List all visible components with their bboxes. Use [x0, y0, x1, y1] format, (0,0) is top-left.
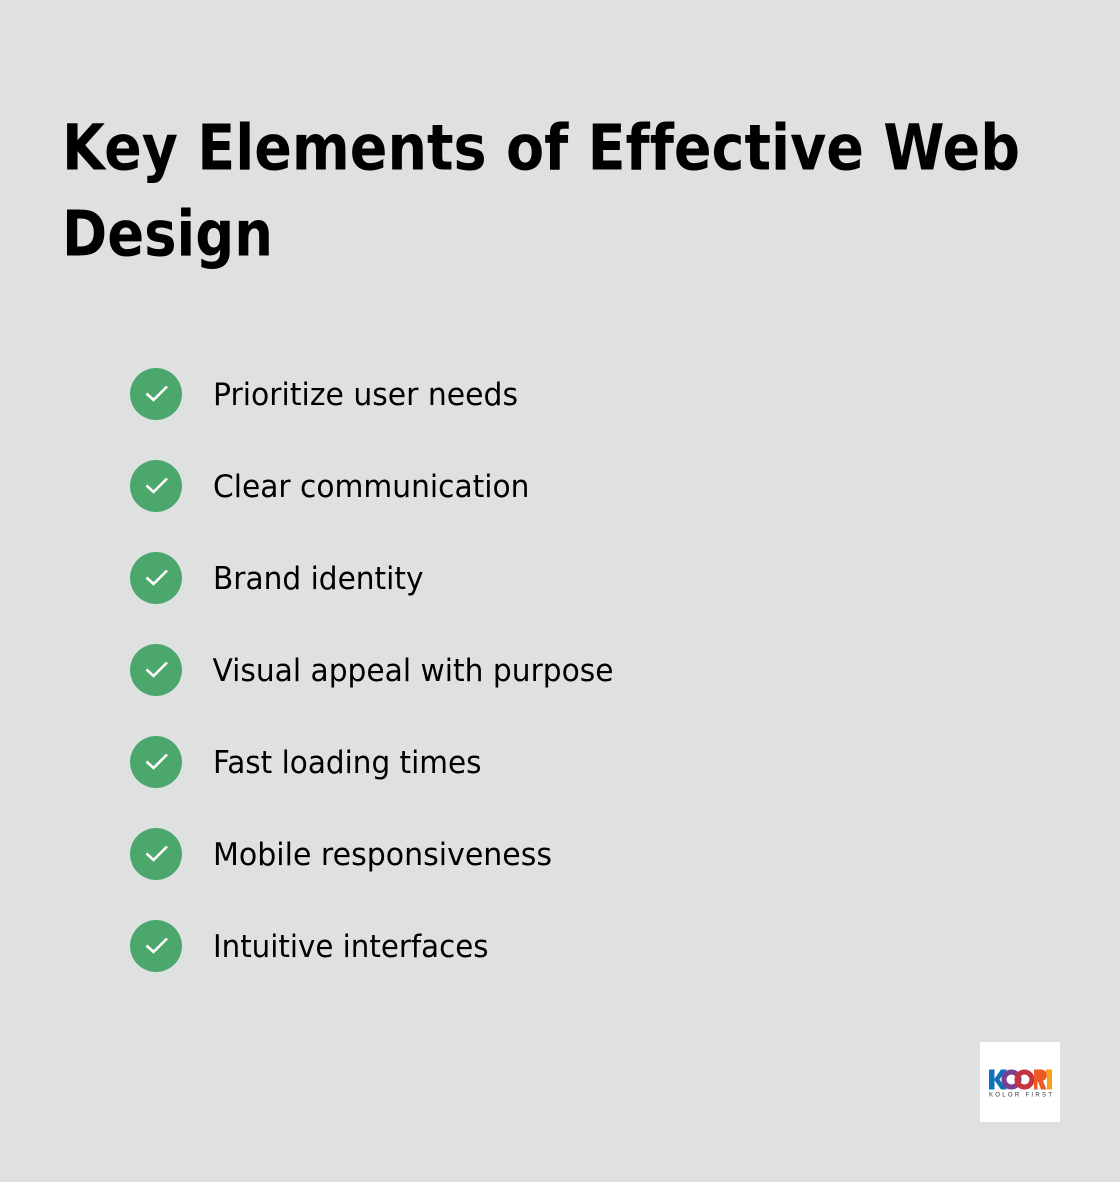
item: Prioritize user needs: Prioritize user needs	[213, 377, 518, 413]
item: Prioritize user needs	[130, 368, 518, 420]
checklist	[130, 368, 614, 972]
item: Fast loading times	[130, 736, 482, 788]
item: Mobile responsiveness: Mobile responsiveness	[213, 837, 552, 873]
item: Brand identity	[130, 552, 424, 604]
title: Key Elements of Effective Web	[62, 112, 1020, 184]
title: Design	[62, 198, 273, 270]
item: Clear communication	[130, 460, 530, 512]
logo: Koor1 Kolor First: KOLOR FIRST	[989, 1092, 1052, 1098]
item: Visual appeal with purpose	[130, 644, 614, 696]
title	[62, 112, 1020, 270]
item: Mobile responsiveness	[130, 828, 552, 880]
item: Visual appeal with purpose: Visual appeal with purpose	[212, 653, 614, 689]
item: Intuitive interfaces: Intuitive interfaces	[213, 929, 488, 965]
item: Intuitive interfaces	[130, 920, 488, 972]
item: Brand identity: Brand identity	[213, 561, 424, 597]
item: Clear communication: Clear communication	[213, 469, 530, 505]
item: Fast loading times: Fast loading times	[213, 745, 482, 781]
logo: Koor1 Kolor First	[980, 1042, 1060, 1122]
